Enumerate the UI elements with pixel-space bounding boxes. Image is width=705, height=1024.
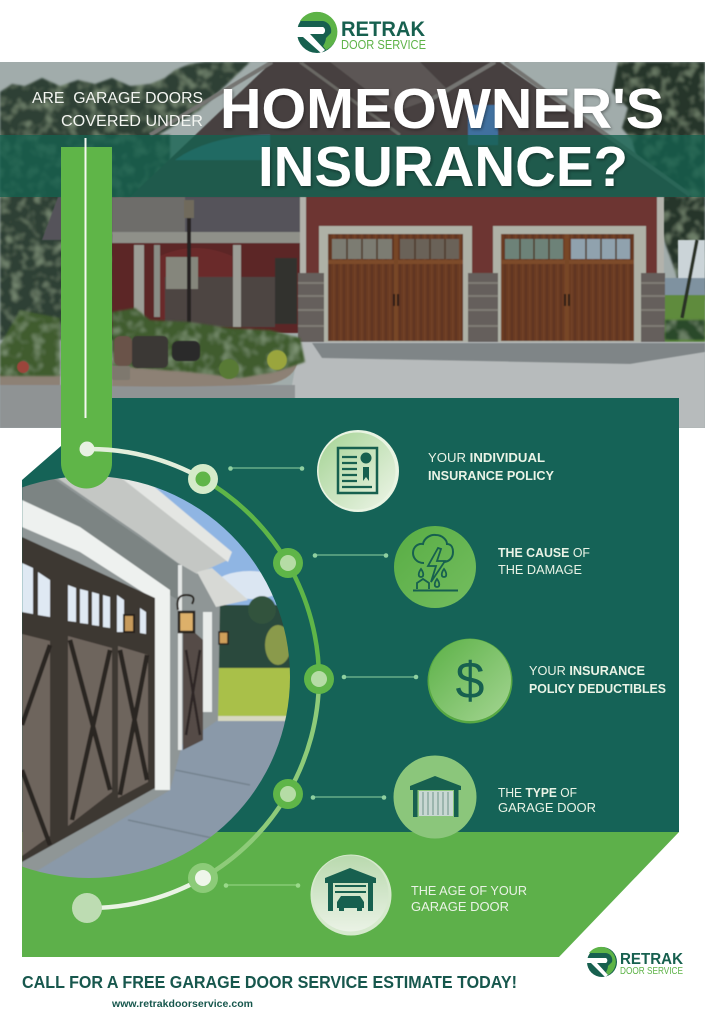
photo: sky <box>153 486 277 606</box>
green lower panel <box>22 832 679 957</box>
label: policy <box>428 450 554 483</box>
connector: cause <box>313 553 388 558</box>
website: www.retrakdoorservice.com <box>111 998 253 1010</box>
photo: trees <box>218 605 293 670</box>
icon: dollar sign <box>428 638 512 724</box>
label: age: GARAGE DOOR <box>411 899 509 914</box>
timeline segment: upper <box>203 479 319 679</box>
label: policy: INSURANCE POLICY <box>428 468 554 483</box>
logo wordmark: RETRAK <box>341 18 425 41</box>
label: type: THE TYPE OF <box>498 785 577 800</box>
photo: house siding <box>22 472 220 880</box>
label: cause: THE CAUSE OF <box>498 545 590 560</box>
node: 2 <box>273 548 303 578</box>
dark teal panel <box>22 398 679 832</box>
icon: garage with car <box>310 854 392 936</box>
photo: sky <box>0 62 705 428</box>
photo: lawn <box>218 668 293 718</box>
node: 4 <box>273 779 303 809</box>
photo: red garage wall <box>306 196 658 274</box>
node: end <box>72 893 102 923</box>
item: age of garage door <box>310 854 527 936</box>
photo: soffit and fascia <box>50 473 228 574</box>
photo: trees <box>0 62 705 340</box>
photo: landscaping <box>0 308 705 378</box>
photo: wall lanterns <box>179 612 194 632</box>
connector: policy <box>228 466 304 471</box>
photo: driveway seams <box>128 770 250 838</box>
title lead-in <box>32 90 203 130</box>
logo wordmark <box>341 18 426 52</box>
timeline segment: last <box>87 878 203 908</box>
label: age: THE AGE OF YOUR <box>411 883 527 898</box>
header logo <box>297 12 426 53</box>
footer logo mark <box>587 947 617 977</box>
item: cause of the damage <box>394 526 590 608</box>
icon: dollar sign: $ <box>456 652 485 710</box>
call to action <box>22 972 517 1010</box>
green vertical tab <box>61 147 112 489</box>
title lead-in: ARE GARAGE DOORS <box>32 90 203 107</box>
footer logo <box>587 947 683 977</box>
photo: right background <box>678 240 705 280</box>
footer logo wordmark: DOOR SERVICE <box>620 966 683 977</box>
icon: policy document <box>317 430 399 512</box>
photo: door windows <box>22 563 146 634</box>
main headline: HOMEOWNER'S <box>220 77 664 141</box>
main headline <box>220 77 664 199</box>
curved timeline <box>87 449 319 908</box>
title <box>32 77 664 199</box>
photo: driveway <box>292 341 705 428</box>
connector: deductibles <box>342 675 418 679</box>
node: start <box>80 442 94 456</box>
main headline: INSURANCE? <box>258 135 628 199</box>
connector: type <box>311 795 386 800</box>
icon: storm cloud <box>394 526 476 608</box>
label: policy: YOUR INDIVIDUAL <box>428 450 545 465</box>
timeline segment: first <box>87 449 203 479</box>
photo: door panels <box>22 634 148 856</box>
photo: cross bracing <box>22 640 147 845</box>
teal title band <box>0 135 705 197</box>
logo wordmark: DOOR SERVICE <box>341 37 426 52</box>
label: deductibles: YOUR INSURANCE <box>529 663 645 678</box>
photo: gravel beds <box>0 360 298 387</box>
node: 1 <box>188 464 218 494</box>
item: individual insurance policy <box>317 430 554 512</box>
footer logo wordmark: RETRAK <box>620 951 683 968</box>
white tab line <box>84 138 86 418</box>
logo mark <box>297 12 337 53</box>
item: insurance policy deductibles <box>428 638 666 724</box>
photo: white door trim <box>22 500 170 790</box>
timeline nodes <box>72 442 334 923</box>
photo: right garage door <box>493 226 646 342</box>
label: age <box>411 883 527 914</box>
label: deductibles <box>529 663 666 696</box>
item: type of garage door <box>394 756 596 838</box>
garage door photo in circle <box>22 470 297 890</box>
title lead-in: COVERED UNDER <box>61 113 203 130</box>
photo: left garage door <box>319 226 472 342</box>
label: type <box>498 785 596 815</box>
node: 5 <box>188 863 218 893</box>
hero photo: house with two wooden garage doors <box>0 62 705 428</box>
node: 3 <box>304 664 334 694</box>
photo: second door and post <box>183 622 203 750</box>
call to action headline: CALL FOR A FREE GARAGE DOOR SERVICE ESTIMATE TODAY! <box>22 972 517 992</box>
photo: garage door <box>22 537 155 862</box>
photo: stone pillars <box>298 273 324 342</box>
footer logo wordmark <box>620 951 683 977</box>
label: cause: THE DAMAGE <box>498 562 582 577</box>
label: deductibles: POLICY DEDUCTIBLES <box>529 681 666 696</box>
timeline segment: lower <box>203 679 319 878</box>
label: type: GARAGE DOOR <box>498 800 596 815</box>
icon: garage with door <box>394 756 476 838</box>
label: cause <box>498 545 590 577</box>
photo: concrete base <box>36 720 286 878</box>
photo: porch roof and walls <box>42 197 300 240</box>
connector: age <box>224 883 300 888</box>
photo: upper house gables <box>130 62 692 197</box>
photo: lamp post <box>184 200 194 330</box>
